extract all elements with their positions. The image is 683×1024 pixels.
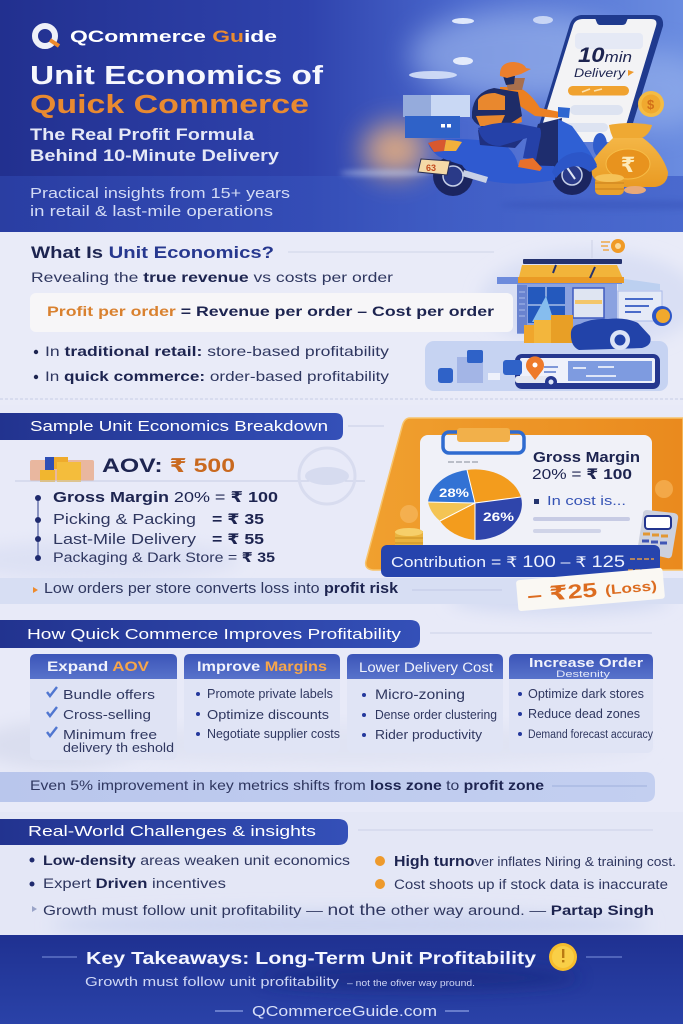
illustration: phone xyxy=(534,15,663,142)
risk note: Low orders per store converts loss into profit risk xyxy=(44,581,399,597)
cost list: Gross Margin 20% = ₹ 100 xyxy=(53,489,278,506)
aov metric xyxy=(30,456,235,482)
section heading: Sample Unit Economics Breakdown xyxy=(30,419,328,435)
challenges left xyxy=(30,852,350,891)
challenges right: Cost shoots up if stock data is inaccurate xyxy=(394,877,668,892)
title: Unit Economics of xyxy=(30,62,324,90)
icon: speed badge xyxy=(592,239,625,258)
card: lower delivery cost: Lower Delivery Cost xyxy=(359,660,493,675)
icon: coin xyxy=(638,91,664,117)
orange summary card xyxy=(366,418,683,611)
bullet points xyxy=(34,343,389,384)
gross margin text xyxy=(532,450,640,533)
card: increase order density xyxy=(509,654,653,753)
pie chart: 26% xyxy=(483,510,514,524)
card: improve margins: Negotiate supplier costs xyxy=(207,727,340,741)
card: increase order density: Destenity xyxy=(556,669,611,679)
pie chart: 28% xyxy=(439,486,469,500)
cost list: = ₹ 55 xyxy=(212,532,264,548)
clipboard xyxy=(420,428,652,560)
icon: alert xyxy=(549,943,577,971)
card: improve margins: Improve Margins xyxy=(197,659,327,674)
card: increase order density: Increase Order xyxy=(529,656,643,670)
illustration: delivery box xyxy=(403,95,470,138)
icon: payment terminal xyxy=(638,510,678,558)
title xyxy=(30,62,324,119)
loss callout: – ₹25 xyxy=(526,579,598,607)
panel: how quick commerce improves profitability xyxy=(0,605,683,812)
illustration: scooter xyxy=(418,118,597,196)
cost list: Picking & Packing xyxy=(53,512,196,528)
icon: money bag: ₹ xyxy=(621,154,635,177)
icon: coin: $ xyxy=(647,97,655,112)
challenges left: Low-density areas weaken unit economics xyxy=(43,852,350,868)
cost list: Last-Mile Delivery xyxy=(53,532,197,548)
card: expand aov xyxy=(30,654,177,760)
card: improve margins xyxy=(184,654,340,753)
footer text xyxy=(85,974,475,989)
insight banner: Even 5% improvement in key metrics shifts from loss zone to profit zone xyxy=(30,777,544,793)
experience note: in retail & last-mile operations xyxy=(30,204,273,220)
footer heading: Key Takeaways: Long-Term Unit Profitability xyxy=(86,948,536,968)
illustration: rider xyxy=(472,62,570,171)
quote: Growth must follow unit profitability — not the other way around. — Partap Singh xyxy=(43,902,654,919)
loss callout: (Loss) xyxy=(604,578,658,598)
experience note: Practical insights from 15+ years xyxy=(30,186,290,202)
bullet points: In quick commerce: order-based profitability xyxy=(45,368,389,384)
card: lower delivery cost: Rider productivity xyxy=(375,727,483,742)
cost list xyxy=(35,489,278,565)
website: QCommerceGuide.com xyxy=(252,1004,437,1020)
footer text: Growth must follow unit profitability xyxy=(85,974,340,989)
challenges left: Expert Driven incentives xyxy=(43,875,226,891)
card: expand aov: Cross-selling xyxy=(63,707,151,722)
illustration: route panel xyxy=(425,341,668,391)
card: increase order density: Optimize dark stores xyxy=(528,687,644,701)
card: lower delivery cost: Dense order clustering xyxy=(375,708,497,722)
section heading xyxy=(0,620,420,648)
card: expand aov: Minimum free xyxy=(63,727,157,742)
subtitle xyxy=(30,126,280,165)
experience note xyxy=(30,186,290,220)
card: expand aov: Expand AOV xyxy=(47,659,149,674)
card: lower delivery cost xyxy=(347,654,503,753)
card: improve margins: Optimize discounts xyxy=(207,707,330,722)
card: improve margins: Promote private labels xyxy=(207,687,333,701)
aov label: AOV: ₹ 500 xyxy=(102,456,235,477)
illustration: scooter: 63 xyxy=(426,163,436,173)
panel: sample breakdown xyxy=(0,405,683,611)
panel: what is unit economics xyxy=(0,232,683,405)
icon: money bag xyxy=(590,123,668,195)
loss callout xyxy=(516,568,665,611)
challenges right xyxy=(375,853,676,892)
section heading: Real-World Challenges & insights xyxy=(28,824,316,840)
formula box xyxy=(30,293,513,332)
illustration: phone: Delivery xyxy=(574,66,626,80)
cost list: = ₹ 35 xyxy=(212,512,264,528)
subtitle: Behind 10-Minute Delivery xyxy=(30,147,280,165)
gross margin text: 20% = ₹ 100 xyxy=(532,467,632,483)
pie chart xyxy=(428,469,522,540)
card: expand aov: Bundle offers xyxy=(63,687,156,702)
section heading xyxy=(0,413,343,440)
section heading: How Quick Commerce Improves Profitability xyxy=(27,627,402,643)
phone label: 10min xyxy=(578,44,632,67)
icon: coins xyxy=(395,528,423,547)
card: increase order density: Demand forecast accuracy xyxy=(528,729,653,741)
insight banner xyxy=(0,772,655,802)
panel: key takeaways footer xyxy=(0,935,683,1024)
heading: What Is Unit Economics? xyxy=(31,244,274,262)
brand name: QCommerce Gu ide xyxy=(70,27,277,46)
title: Quick Commerce xyxy=(30,91,309,119)
logo xyxy=(35,26,277,46)
panel: hero header xyxy=(0,0,683,232)
gross margin text: In cost is... xyxy=(547,493,626,508)
card: increase order density: Reduce dead zones xyxy=(528,707,640,721)
contribution bar: Contribution = ₹ 100 – ₹ 125 xyxy=(391,553,625,571)
illustration: dark store xyxy=(497,259,672,350)
contribution bar xyxy=(381,545,660,577)
gross margin text: Gross Margin xyxy=(533,450,640,466)
bullet points: In traditional retail: store-based profitability xyxy=(45,343,389,359)
card: expand aov: delivery th eshold xyxy=(63,741,174,755)
section heading xyxy=(0,819,348,845)
cost list: Packaging & Dark Store = ₹ 35 xyxy=(53,550,276,565)
formula box: Profit per order = Revenue per order – Cost per order xyxy=(47,303,495,319)
footer text: – not the ofiver way pround. xyxy=(347,978,475,988)
card: lower delivery cost: Micro-zoning xyxy=(375,687,465,702)
intro text: Revealing the true revenue vs costs per order xyxy=(31,269,393,285)
panel: real-world challenges xyxy=(0,812,683,939)
challenges right: High turno ver inflates Niring & training cost. xyxy=(394,853,676,870)
subtitle: The Real Profit Formula xyxy=(30,126,255,144)
